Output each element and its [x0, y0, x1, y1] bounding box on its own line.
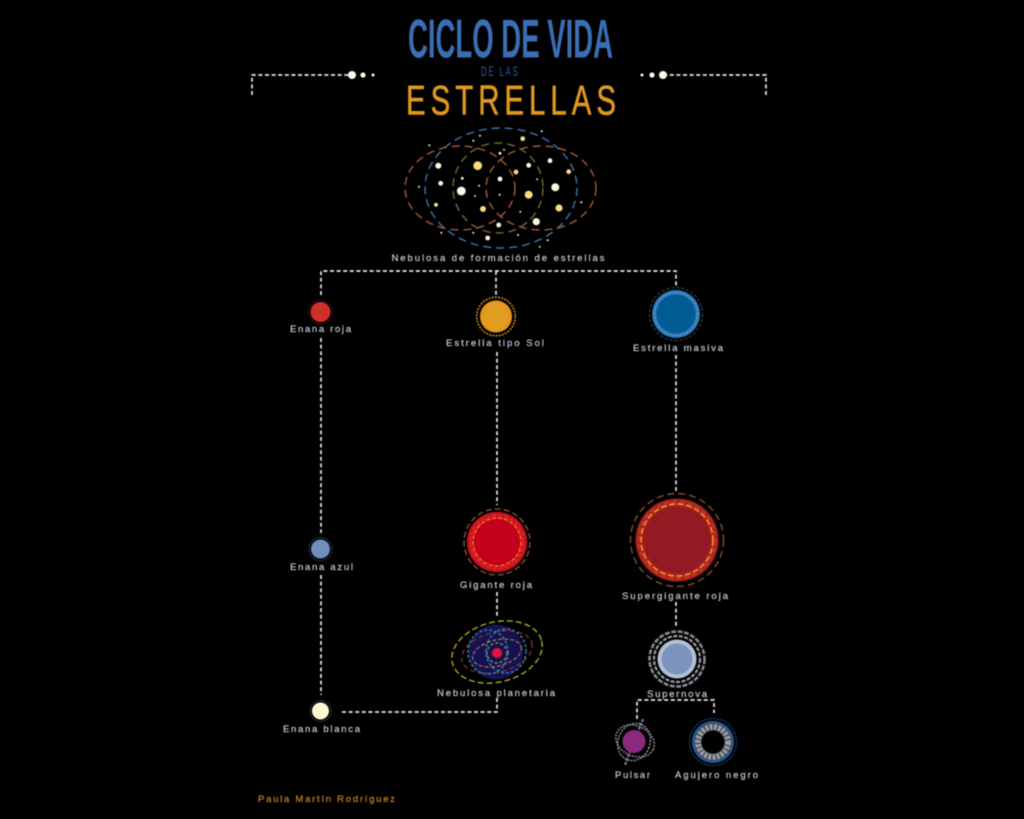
- star: white dwarf: [310, 700, 331, 722]
- label: blue dwarf: Enana azul: [290, 562, 353, 573]
- label: nebula: Nebulosa de formación de estrellas: [392, 253, 605, 264]
- title: Estrellas: ESTRELLAS: [406, 76, 616, 124]
- supernova: [650, 632, 704, 686]
- left title bracket with dots: [252, 71, 374, 95]
- connector lines: [321, 271, 714, 719]
- star: red supergiant: [630, 494, 724, 586]
- label: red giant: Gigante roja: [460, 580, 533, 591]
- author credit: Paula Martín Rodríguez: [258, 794, 395, 805]
- label: planetary nebula: Nebulosa planetaria: [437, 688, 556, 699]
- black hole: [690, 718, 736, 766]
- star: massive: [650, 288, 702, 340]
- label: massive star: Estrella masiva: [633, 343, 724, 354]
- title: Ciclo de vida: CICLO DE VIDA: [408, 8, 613, 70]
- subtitle: de las: DE LAS: [481, 65, 518, 80]
- planetary nebula: [445, 612, 549, 692]
- label: sun-like star: Estrella tipo Sol: [446, 338, 544, 349]
- label: pulsar: Pulsar: [615, 770, 650, 781]
- label: red supergiant: Supergigante roja: [622, 591, 729, 602]
- star: red giant: [464, 509, 530, 575]
- pulsar: [611, 719, 659, 765]
- label: supernova: Supernova: [647, 689, 708, 700]
- stellar nursery nebula: [405, 128, 596, 248]
- label: black hole: Agujero negro: [675, 770, 758, 781]
- star: sun-like: [477, 297, 515, 336]
- label: red dwarf: Enana roja: [290, 324, 352, 335]
- label: white dwarf: Enana blanca: [283, 724, 361, 735]
- star: red dwarf: [308, 300, 332, 324]
- star: blue dwarf: [309, 538, 332, 560]
- right title bracket with dots: [640, 71, 766, 95]
